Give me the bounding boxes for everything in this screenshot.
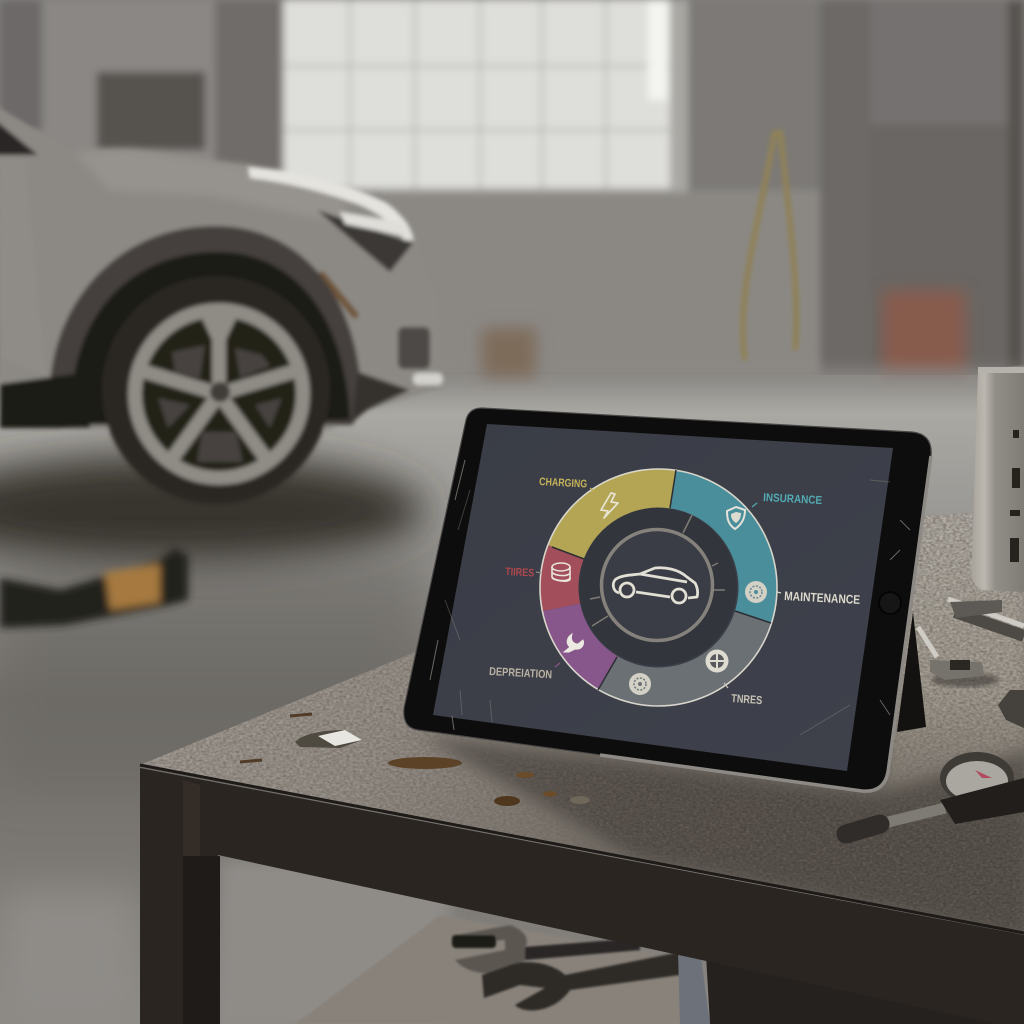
screen scratches bbox=[445, 480, 890, 735]
tablet metal edge bbox=[600, 456, 931, 791]
car window bbox=[0, 120, 38, 155]
donut chart bbox=[489, 469, 860, 707]
hub disc bbox=[579, 508, 737, 666]
segment: charging bbox=[548, 469, 676, 559]
hub ticks bbox=[590, 515, 725, 626]
workbench bbox=[130, 500, 1024, 1024]
distant wooden crate bbox=[482, 328, 536, 378]
wrenches under table bbox=[452, 925, 680, 1010]
icon: tyre bbox=[706, 650, 728, 672]
label: insurance: INSURANCE bbox=[763, 492, 823, 507]
steel nut bbox=[998, 690, 1024, 728]
garage background: wall and window bbox=[0, 0, 1024, 390]
segment: depreciation bbox=[542, 604, 618, 690]
icon: wheel disc bbox=[629, 673, 651, 695]
blue-grey object and dark box under table bbox=[678, 950, 1024, 1024]
car headlight bbox=[317, 210, 413, 272]
drill on floor bbox=[0, 548, 188, 628]
tablet body bbox=[404, 408, 931, 791]
bench edge bbox=[140, 765, 1024, 933]
distant floor bbox=[0, 375, 1024, 1024]
tablet camera bbox=[879, 592, 901, 614]
tablet bbox=[404, 408, 931, 791]
tablet stand bbox=[897, 612, 926, 732]
front wheel bbox=[102, 276, 330, 504]
label: depreciation: DEPREIATION bbox=[489, 666, 552, 681]
segment: red tyres bbox=[540, 545, 584, 611]
panel: distant cabinet bbox=[97, 72, 205, 150]
metal can bbox=[971, 365, 1024, 592]
bench apron bbox=[140, 768, 1024, 1024]
leader: insurance bbox=[752, 503, 757, 507]
tablet screen bbox=[433, 424, 893, 771]
car bbox=[0, 105, 443, 504]
bench top bbox=[130, 500, 1024, 940]
distant yellow hose bbox=[743, 130, 796, 360]
floor shadows bbox=[0, 454, 450, 1024]
distant red box bbox=[882, 290, 966, 370]
bezel scratches bbox=[430, 460, 910, 730]
rust and spills bbox=[240, 714, 590, 806]
icon: coin stack bbox=[552, 563, 570, 581]
screwdriver bbox=[846, 778, 1024, 834]
lower sill bbox=[0, 372, 90, 428]
leader: maintenance bbox=[777, 592, 781, 593]
icon: brake disc bbox=[745, 581, 767, 603]
separators bbox=[552, 470, 771, 690]
concrete slab under table bbox=[295, 915, 690, 1024]
outer ring bbox=[540, 469, 777, 706]
leader: tyres grey bbox=[724, 683, 728, 688]
leader: charging bbox=[590, 488, 594, 491]
label: tires red: TIIRES bbox=[505, 566, 534, 580]
window bbox=[282, 0, 688, 192]
pressure gauge bbox=[940, 752, 1014, 804]
wheel arch bbox=[50, 226, 362, 425]
icon: shield bbox=[727, 507, 745, 529]
label: tyres grey: TNRES bbox=[731, 693, 763, 707]
label: charging: CHARGING bbox=[539, 476, 587, 491]
wrench on bench, right bbox=[948, 599, 1024, 636]
icon: lightning bolt bbox=[601, 493, 618, 518]
leader: tires red bbox=[536, 572, 541, 573]
inner ring bbox=[602, 530, 712, 640]
car body bbox=[0, 105, 442, 430]
segment: tyres bbox=[598, 612, 772, 706]
icon: car bbox=[613, 568, 698, 603]
amber side marker bbox=[322, 275, 355, 315]
wrench on bench, middle bbox=[918, 627, 999, 687]
segment: insurance bbox=[670, 470, 777, 623]
label: maintenance: MAINTENANCE bbox=[784, 589, 860, 607]
leader: depreciation bbox=[555, 663, 560, 667]
tablet cast shadow bbox=[420, 735, 1024, 940]
icon: wrench bbox=[564, 634, 584, 652]
